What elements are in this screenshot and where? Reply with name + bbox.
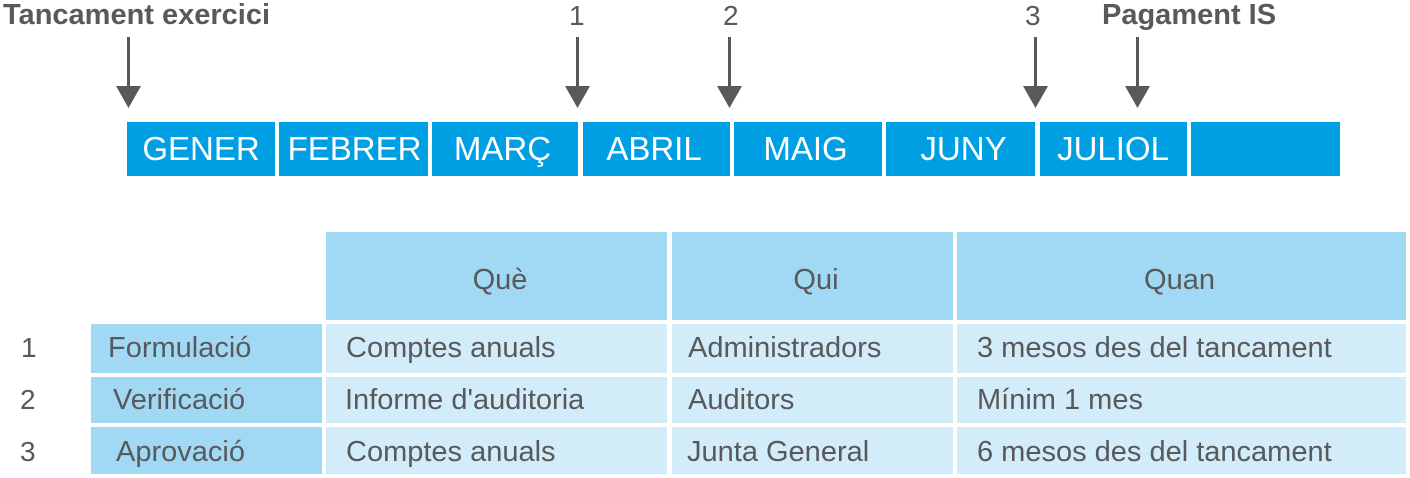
header: Què: Què bbox=[473, 264, 527, 296]
month: JUNY bbox=[886, 122, 1035, 176]
cell: 3 mesos des del tancament: 3 mesos des del tancament bbox=[977, 332, 1332, 364]
row label: Verificació bbox=[91, 377, 322, 423]
arrow: 1 bbox=[565, 37, 590, 108]
row label: Formulació: Formulació bbox=[108, 332, 251, 364]
month: ABRIL bbox=[583, 122, 730, 176]
header: Qui: Qui bbox=[793, 264, 839, 296]
cell: Auditors: Auditors bbox=[688, 384, 794, 416]
row number 2: 2 bbox=[20, 384, 36, 415]
header: Quan bbox=[957, 232, 1406, 320]
header: Què bbox=[326, 232, 667, 320]
month: MAIG: MAIG bbox=[763, 130, 848, 167]
cell: 6 mesos des del tancament bbox=[957, 427, 1406, 474]
cell: Comptes anuals bbox=[326, 427, 667, 474]
arrow: 3 bbox=[1023, 37, 1048, 108]
month: ABRIL: ABRIL bbox=[606, 130, 702, 167]
month: FEBRER bbox=[279, 122, 428, 176]
label: 1: 1 bbox=[569, 0, 585, 31]
cell: Administradors: Administradors bbox=[688, 332, 881, 364]
label: 3: 3 bbox=[1025, 0, 1041, 31]
cell: Comptes anuals: Comptes anuals bbox=[346, 436, 556, 468]
cell: Junta General: Junta General bbox=[687, 436, 869, 468]
month: JULIOL bbox=[1040, 122, 1187, 176]
row label: Aprovació bbox=[91, 427, 322, 474]
row number 1: 1 bbox=[21, 332, 37, 363]
cell: Junta General bbox=[672, 427, 953, 474]
row label: Verificació: Verificació bbox=[113, 384, 245, 416]
cell: Auditors bbox=[672, 377, 953, 423]
arrows bbox=[116, 37, 1150, 108]
label: 2: 2 bbox=[723, 0, 739, 31]
arrow: Tancament exercici bbox=[116, 37, 141, 108]
cell: 3 mesos des del tancament bbox=[957, 324, 1406, 373]
cell: Comptes anuals bbox=[326, 324, 667, 373]
month: MARÇ bbox=[432, 122, 578, 176]
cell: Comptes anuals: Comptes anuals bbox=[346, 332, 556, 364]
month: GENER: GENER bbox=[142, 130, 260, 167]
header: Qui bbox=[672, 232, 953, 320]
month: JUNY: JUNY bbox=[920, 130, 1007, 167]
row label: Formulació bbox=[91, 324, 322, 373]
month: FEBRER: FEBRER bbox=[288, 130, 421, 167]
month: MARÇ: MARÇ bbox=[454, 130, 551, 167]
header: Quan: Quan bbox=[1144, 264, 1215, 296]
cell: Informe d'auditoria: Informe d'auditoria bbox=[345, 384, 584, 416]
arrow: Pagament IS bbox=[1125, 37, 1150, 108]
cell: 6 mesos des del tancament: 6 mesos des del tancament bbox=[977, 436, 1332, 468]
row number 3: 3 bbox=[20, 436, 36, 467]
arrow: 2 bbox=[717, 37, 742, 108]
month: empty bbox=[1191, 122, 1340, 176]
month: JULIOL: JULIOL bbox=[1057, 130, 1169, 167]
cell: Mínim 1 mes bbox=[957, 377, 1406, 423]
cell: Administradors bbox=[672, 324, 953, 373]
table bbox=[20, 232, 1406, 474]
row label: Aprovació: Aprovació bbox=[116, 436, 245, 468]
cell: Informe d'auditoria bbox=[326, 377, 667, 423]
month: GENER bbox=[127, 122, 275, 176]
cell: Mínim 1 mes: Mínim 1 mes bbox=[977, 384, 1143, 416]
timeline labels and arrows bbox=[3, 0, 1276, 108]
month bar bbox=[127, 122, 1340, 176]
month: MAIG bbox=[734, 122, 882, 176]
